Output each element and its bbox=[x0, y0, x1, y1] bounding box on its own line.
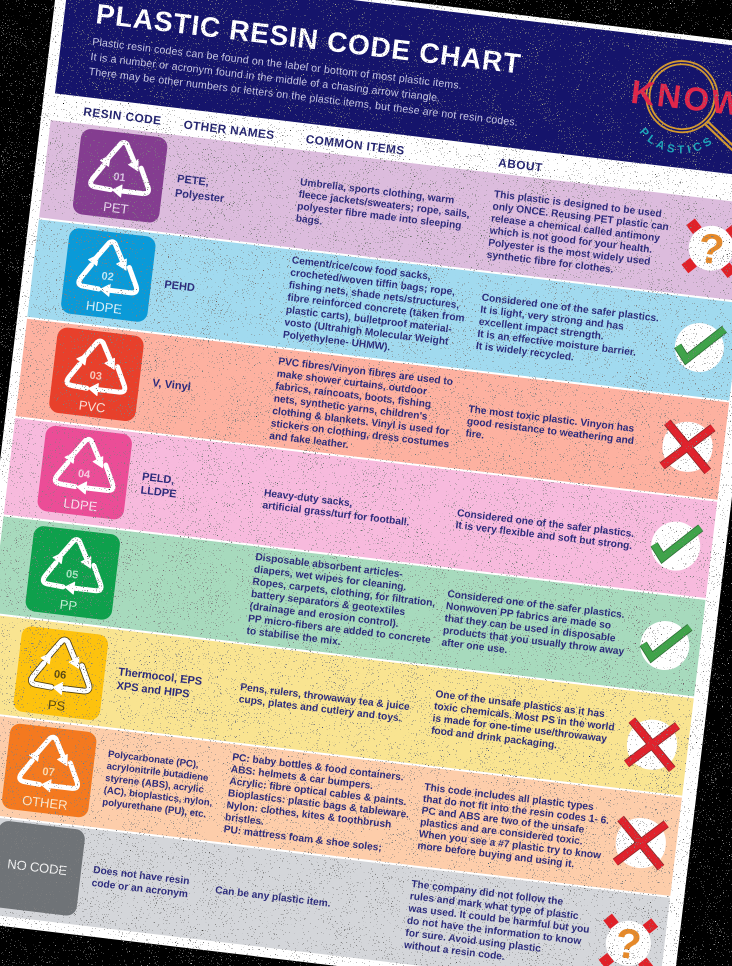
common items: make shower curtains, outdoor bbox=[276, 369, 428, 398]
other names: code or an acronym bbox=[91, 878, 188, 900]
about: Considered one of the safer plastics. bbox=[481, 292, 659, 324]
about: release a chemical called antimony bbox=[491, 213, 661, 244]
other names: Does not have resin bbox=[93, 865, 190, 887]
about: toxic chemicals. Most PS in the world bbox=[433, 701, 615, 734]
icon: red cross bbox=[660, 419, 715, 475]
icon: PS code: 06 bbox=[53, 668, 67, 682]
common items: PU: mattress foam & shoe soles; bbox=[223, 824, 382, 854]
icon: red cross bbox=[624, 717, 680, 772]
panel: PS row bbox=[0, 615, 694, 796]
common items: diapers, wet wipes for cleaning. bbox=[253, 564, 407, 593]
icon: PET code: PET bbox=[102, 199, 129, 217]
other names: styrene (ABS), acrylic bbox=[105, 773, 205, 796]
common items: Heavy-duty sacks, bbox=[263, 488, 353, 509]
other names: Polycarbonate (PC), bbox=[107, 749, 199, 771]
icon: question mark bbox=[681, 218, 732, 279]
common items: fibre reinforced concrete (taken from bbox=[287, 292, 465, 324]
icon: PS code: PS bbox=[47, 697, 66, 714]
common items: ABS: helmets & car bumpers. bbox=[230, 764, 374, 792]
other names: Thermocol, EPS bbox=[118, 666, 203, 688]
other names: polyurethane (PU), etc. bbox=[102, 797, 207, 820]
common items: Can be any plastic item. bbox=[215, 885, 331, 910]
about: only ONCE. Reusing PET plastic can bbox=[492, 201, 669, 233]
about: Nonwoven PP fabrics are made so bbox=[445, 601, 612, 632]
icon: question mark bbox=[598, 913, 659, 966]
panel: HDPE row bbox=[27, 219, 732, 400]
about: synthetic fibre for clothes. bbox=[486, 250, 614, 276]
panel: header banner bbox=[54, 0, 732, 174]
common items: PVC fibres/Vinyon fibres are used to bbox=[278, 356, 454, 388]
icon: OTHER code: 07 bbox=[42, 766, 55, 779]
common items: (drainage and erosion control). bbox=[249, 601, 399, 630]
about: that do not fit into the resin codes 1- 6. bbox=[422, 794, 610, 827]
about: This plastic is designed to be used bbox=[493, 189, 662, 220]
icon: OTHER code bbox=[1, 723, 98, 818]
logo: know plastics bbox=[629, 60, 732, 154]
title: PLASTIC RESIN CODE CHART bbox=[94, 0, 522, 80]
panel: NO CODE row bbox=[0, 814, 670, 966]
column headings: COMMON ITEMS bbox=[305, 132, 405, 158]
icon: PP code: PP bbox=[59, 597, 78, 614]
icon: PVC code: PVC bbox=[78, 398, 106, 416]
icon: LDPE code: 04 bbox=[77, 468, 92, 481]
common items: nets, synthetic yarns, children's bbox=[273, 394, 428, 423]
icon: HDPE code bbox=[60, 227, 157, 323]
column headings: ABOUT bbox=[498, 155, 544, 175]
common items: Ropes, carpets, clothing, for filtration, bbox=[252, 577, 436, 609]
intro text: It is a number or acronym found in the middle of a chasing arrow triangle. bbox=[90, 51, 441, 105]
about: after one use. bbox=[441, 637, 508, 656]
panel: LDPE row bbox=[4, 418, 717, 598]
common items: Umbrella, sports clothing, warm bbox=[299, 177, 455, 206]
panel: PET row bbox=[39, 120, 732, 301]
icon: green check bbox=[648, 519, 703, 573]
other names: acrylonitrile butadiene bbox=[106, 761, 209, 784]
other names: Polyester bbox=[174, 187, 226, 205]
common items: polyester fibre made into sleeping bbox=[297, 201, 462, 232]
about: This code includes all plastic types bbox=[424, 782, 594, 813]
common items: and fake leather. bbox=[269, 431, 349, 451]
icon: LDPE code: LDPE bbox=[63, 495, 98, 514]
common items: crocheted/woven tiffin bags; rope, bbox=[290, 268, 456, 298]
about: do not have the information to know bbox=[406, 916, 582, 947]
common items: artificial grass/turf for football. bbox=[262, 500, 410, 529]
common items: Cement/rice/cow food sacks, bbox=[291, 255, 431, 283]
icon: PP code bbox=[25, 525, 121, 621]
icon: PVC code bbox=[48, 326, 145, 422]
intro text: Plastic resin codes can be found on the label or bottom of most plastic items. bbox=[92, 36, 462, 92]
about: that they can be used in disposable bbox=[444, 613, 616, 645]
other names: PELD, bbox=[141, 471, 175, 487]
column headings bbox=[83, 104, 544, 175]
about: The company did not follow the bbox=[411, 879, 564, 908]
icon: PET code bbox=[72, 128, 168, 224]
about: rules and mark what type of plastic bbox=[409, 891, 579, 922]
common items: fabrics, raincoats, boots, fishing bbox=[275, 381, 432, 411]
about: It is very flexible and soft but strong. bbox=[455, 520, 633, 552]
icon: HDPE code: HDPE bbox=[85, 298, 123, 317]
panel: PP row bbox=[0, 516, 706, 696]
common items: Nylon: clothes, kites & toothbrush bbox=[226, 800, 392, 831]
other names: V, Vinyl bbox=[152, 377, 191, 394]
other names: (AC), bioplastics, nylon, bbox=[103, 785, 213, 809]
panel: PVC row bbox=[15, 319, 729, 500]
common items: fleece jackets/sweaters; rope, sails, bbox=[298, 189, 470, 221]
about: excellent impact strength. bbox=[478, 317, 604, 342]
logo: know plastics: PLASTICS bbox=[640, 127, 712, 154]
about: Polyester is the most widely used bbox=[488, 238, 651, 268]
common items: Pens, rulers, throwaway tea & juice bbox=[240, 682, 410, 713]
icon: red cross bbox=[613, 815, 669, 871]
common items: to stabilise the mix. bbox=[246, 626, 341, 648]
common items: Acrylic: fibre optical cables & paints. bbox=[229, 776, 407, 808]
icon: PVC code: 03 bbox=[89, 370, 103, 383]
common items: vosto (Ultrahigh Molecular Weight bbox=[284, 317, 450, 348]
about: plastics and are considered toxic. bbox=[420, 817, 583, 848]
icon: NO CODE badge: NO CODE bbox=[7, 856, 68, 878]
common items: Polyethylene- UHMW). bbox=[282, 330, 391, 353]
about: One of the unsafe plastics as it has bbox=[435, 689, 605, 720]
icon: PET code: 01 bbox=[113, 171, 126, 184]
about: food and drink packaging. bbox=[430, 725, 558, 751]
about: without a resin code. bbox=[402, 940, 505, 963]
common items: clothing & blankets. Vinyl is used for bbox=[272, 406, 450, 438]
about: It is an effective moisture barrier. bbox=[477, 329, 637, 359]
about: The most toxic plastic. Vinyon has bbox=[468, 404, 635, 435]
about: is made for one-time use/throwaway bbox=[432, 713, 608, 745]
other names: LLDPE bbox=[140, 484, 177, 501]
about: PC and ABS are two of the unsafe bbox=[421, 806, 585, 836]
other names: PEHD bbox=[164, 279, 195, 294]
icon: green check bbox=[638, 618, 692, 673]
common items: PC: baby bottles & food containers. bbox=[232, 752, 404, 783]
about: It is widely recycled. bbox=[475, 341, 575, 364]
icon: green check bbox=[672, 320, 727, 375]
common items: bags. bbox=[295, 213, 323, 228]
intro text: There may be other numbers or letters on the plastic items, but these are not resin codes. bbox=[88, 66, 518, 129]
icon: NO CODE badge bbox=[0, 820, 86, 917]
about: for sure. Avoid using plastic bbox=[405, 928, 542, 955]
common items: cups, plates and cutlery and toys. bbox=[238, 694, 402, 725]
about: It is light, very strong and has bbox=[480, 305, 625, 333]
icon: PP code: 05 bbox=[65, 568, 79, 582]
about: Considered one of the safer plastics. bbox=[447, 589, 625, 621]
column headings: RESIN CODE bbox=[83, 104, 162, 128]
common items: stickers on clothing, dress costumes bbox=[270, 418, 450, 451]
column headings: OTHER NAMES bbox=[183, 117, 275, 142]
about: was used. It could be harmful but you bbox=[407, 903, 590, 936]
panel: OTHER row bbox=[0, 714, 682, 896]
icon: LDPE code bbox=[36, 425, 133, 520]
common items: bristles. bbox=[224, 812, 265, 828]
intro text bbox=[88, 36, 522, 129]
icon: PS code bbox=[13, 625, 109, 721]
common items: battery separators & geotextiles bbox=[250, 589, 406, 618]
common items: Bioplastics: plastic bags & tableware. bbox=[227, 788, 410, 821]
icon: OTHER code: OTHER bbox=[21, 793, 68, 813]
common items: plastic carts), bulletproof material- bbox=[285, 305, 452, 336]
about: products that you usually throw away bbox=[442, 625, 625, 658]
other names: PETE, bbox=[176, 173, 209, 189]
common items: fishing nets, shade nets/structures, bbox=[288, 280, 460, 311]
about: Considered one of the safer plastics. bbox=[456, 508, 635, 540]
other names: XPS and HIPS bbox=[116, 680, 190, 701]
about: good resistance to weathering and bbox=[466, 416, 635, 447]
about: which is not good for your health. bbox=[488, 225, 653, 256]
about: more before buying and using it. bbox=[417, 841, 575, 870]
common items: Disposable absorbent articles- bbox=[255, 552, 403, 580]
about: When you see a #7 plastic try to know bbox=[418, 829, 602, 862]
about: fire. bbox=[465, 428, 485, 442]
common items: PP micro-fibers are added to concrete bbox=[247, 614, 432, 646]
icon: HDPE code: 02 bbox=[101, 270, 114, 284]
